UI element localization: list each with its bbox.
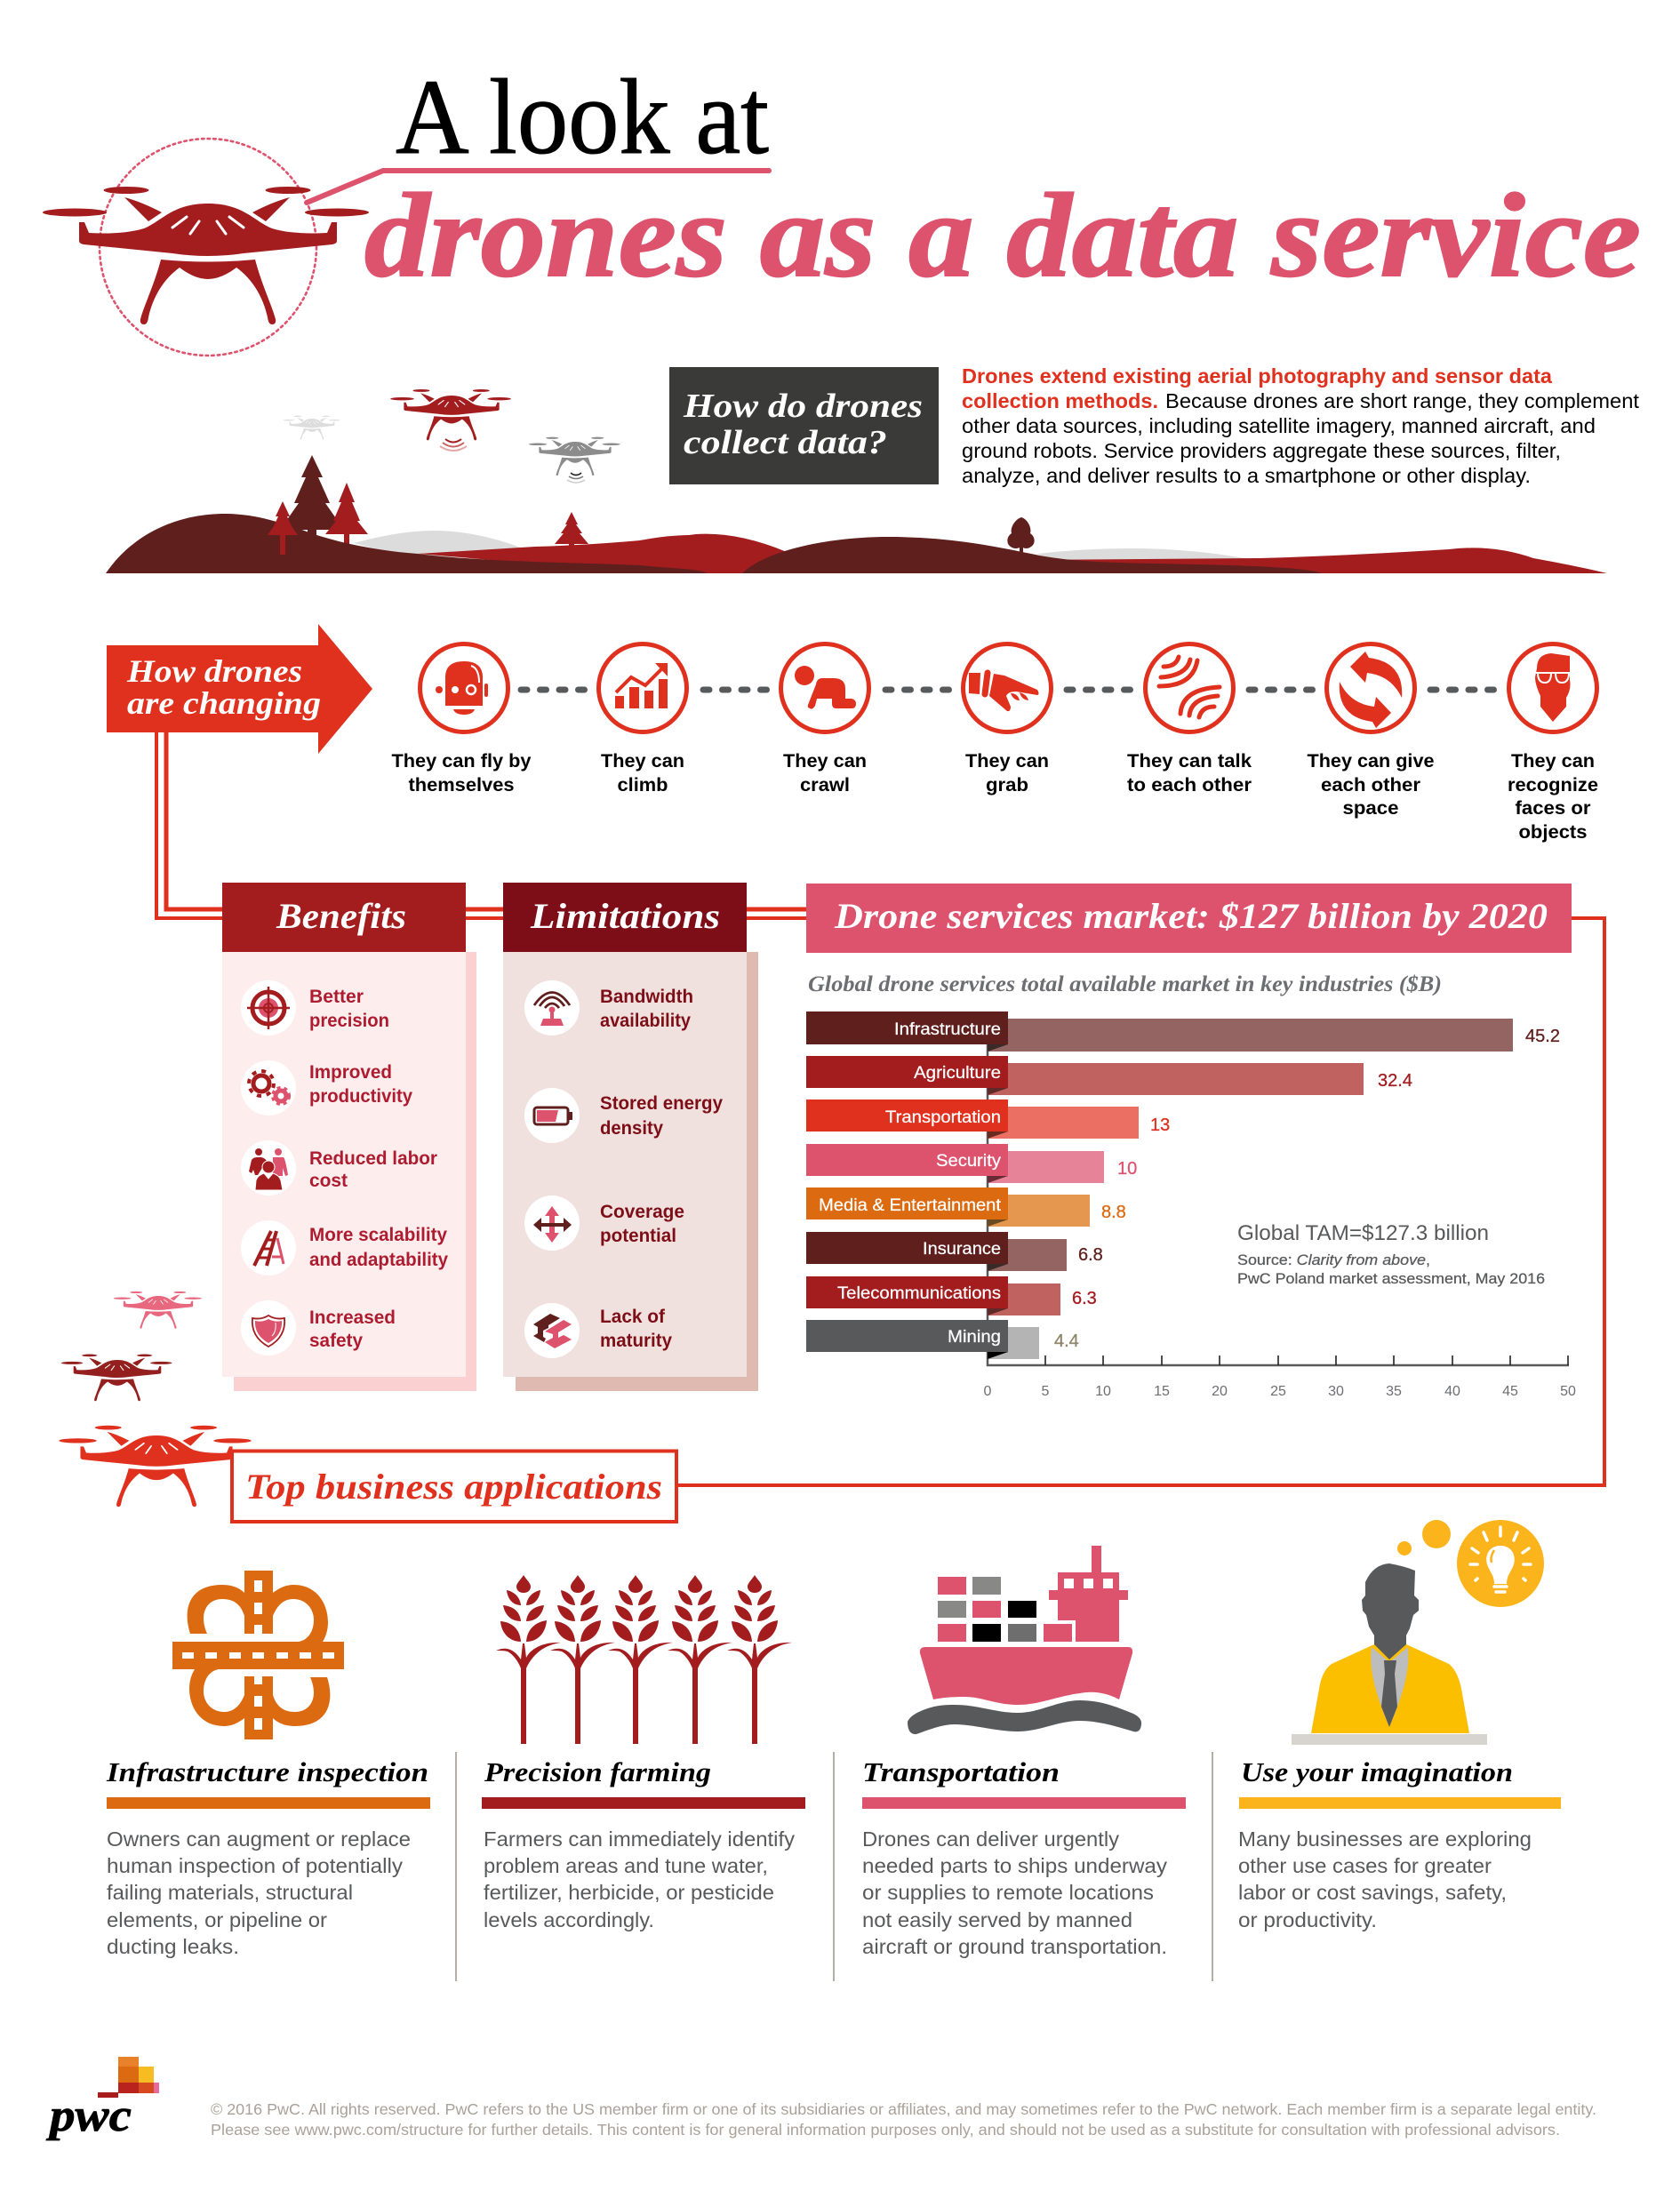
limitations header: Limitations xyxy=(530,896,720,936)
top business applications heading with drone xyxy=(59,1426,676,1522)
capability: recognize faces or objects: recognize xyxy=(1508,774,1598,796)
capability: climb: climb xyxy=(617,774,668,796)
application: infrastructure inspection: failing materials, structural xyxy=(107,1881,353,1904)
icon: wheat xyxy=(496,1575,792,1744)
capability: give each other space: each other xyxy=(1321,774,1421,796)
application: use your imagination: or productivity. xyxy=(1238,1908,1377,1931)
capability: crawl: They can xyxy=(783,750,867,772)
dotted connectors between capability icons xyxy=(521,686,1494,693)
bar: transportation 13: Transportation xyxy=(885,1107,1001,1127)
chart axes: 30 xyxy=(1328,1384,1344,1399)
application: precision farming xyxy=(482,1575,805,1931)
bar: insurance 6.8: 6.8 xyxy=(1078,1245,1103,1265)
title: A look at: A look at xyxy=(396,58,769,177)
benefit: increased safety: Increased xyxy=(309,1307,396,1328)
benefit: scalability: More scalability xyxy=(309,1224,447,1245)
bar: security 10 xyxy=(806,1144,1137,1183)
icon: pink drone xyxy=(114,1291,202,1329)
chart axes: 25 xyxy=(1270,1384,1286,1399)
application: infrastructure inspection: elements, or pipeline or xyxy=(107,1908,327,1931)
chart axes: 45 xyxy=(1502,1384,1518,1399)
benefit: reduced labor cost xyxy=(241,1140,438,1195)
application: precision farming: fertilizer, herbicide, or pesticide xyxy=(484,1881,774,1904)
benefits header: Benefits xyxy=(276,896,406,936)
connector line from market panel to top business applications xyxy=(676,918,1604,1485)
benefit: scalability xyxy=(241,1220,448,1275)
application: transportation: aircraft or ground transportation. xyxy=(862,1935,1167,1958)
bar chart: market by industry xyxy=(806,1012,1576,1399)
application: use your imagination: other use cases for greater xyxy=(1238,1854,1492,1877)
text block: intro paragraph: analyze, and deliver results to a smartphone or other display. xyxy=(962,464,1531,487)
application: use your imagination: Many businesses are exploring xyxy=(1238,1827,1532,1851)
text block: global TAM and source xyxy=(1237,1221,1545,1287)
icon: grey drone with signal xyxy=(529,437,620,483)
benefits header xyxy=(222,883,466,952)
bar: mining 4.4: Mining xyxy=(948,1327,1001,1347)
benefit: better precision: precision xyxy=(309,1010,389,1031)
benefit: reduced labor cost: cost xyxy=(309,1170,348,1191)
capability: give each other space xyxy=(1307,644,1435,819)
capability: climb xyxy=(599,644,686,796)
icon: light grey drone xyxy=(283,416,340,440)
benefit: increased safety: safety xyxy=(309,1330,363,1351)
benefit: scalability: and adaptability xyxy=(309,1249,448,1270)
title leader line xyxy=(307,171,769,203)
benefit: increased safety xyxy=(241,1300,396,1355)
limitation: bandwidth: availability xyxy=(600,1010,691,1031)
limitation: lack of maturity: Lack of xyxy=(600,1306,666,1327)
bar: security 10: Security xyxy=(936,1151,1001,1171)
PwC logo: pwc xyxy=(46,2091,132,2141)
benefit: improved productivity: productivity xyxy=(309,1085,412,1107)
application: use your imagination xyxy=(1238,1520,1561,1931)
landscape with hills and trees xyxy=(106,455,1607,573)
application: transportation: Drones can deliver urgently xyxy=(862,1827,1119,1851)
bar: agriculture 32.4: 32.4 xyxy=(1378,1071,1412,1091)
benefit: better precision xyxy=(241,980,389,1036)
capability: grab xyxy=(964,644,1051,796)
bar: infrastructure 45.2 xyxy=(806,1012,1560,1052)
panel: how do drones collect data: How do drones xyxy=(683,388,923,425)
text block: global TAM and source: Source: Clarity from above , xyxy=(1237,1251,1430,1268)
bar: transportation 13 xyxy=(806,1100,1170,1139)
application: use your imagination: Use your imagination xyxy=(1241,1756,1513,1787)
chart axes xyxy=(984,1044,1576,1399)
capability: talk to each other: to each other xyxy=(1127,774,1252,796)
application: infrastructure inspection: human inspection of potentially xyxy=(107,1854,403,1877)
capability: fly by themselves: themselves xyxy=(409,774,515,796)
arrow: how drones are changing: are changing xyxy=(127,685,321,721)
benefit: improved productivity xyxy=(241,1060,412,1115)
footer legal text: Please see www.pwc.com/structure for further details. This content is for general information purposes only, and should not be used as a substitute for consultation with professional advisors. xyxy=(211,2121,1560,2139)
text block: intro paragraph: Because drones are short range, they complement xyxy=(1165,389,1640,412)
top business applications heading with drone: Top business applications xyxy=(245,1467,662,1507)
panel: how do drones collect data: collect data? xyxy=(684,424,887,461)
chart axes: 35 xyxy=(1386,1384,1402,1399)
panel header: drone services market: Drone services market: $127 billion by 2020 xyxy=(834,896,1548,936)
benefit: improved productivity: Improved xyxy=(309,1061,392,1083)
panel: benefits xyxy=(222,883,476,1391)
chart subtitle: Global drone services total available market in key industries ($B) xyxy=(808,972,1442,996)
icon: cargo ship xyxy=(908,1546,1141,1734)
capability: grab: grab xyxy=(986,774,1028,796)
bar: mining 4.4: 4.4 xyxy=(1054,1331,1079,1351)
limitation: coverage potential: potential xyxy=(600,1225,676,1246)
footer legal text: © 2016 PwC. All rights reserved. PwC refers to the US member firm or one of its subsidiaries or affiliates, and may sometimes refer to the PwC network. Each member firm is a separate legal entity. xyxy=(211,2100,1596,2118)
capability: recognize faces or objects: faces or xyxy=(1515,797,1591,819)
application: infrastructure inspection xyxy=(106,1571,430,1958)
application: use your imagination: labor or cost savings, safety, xyxy=(1238,1881,1507,1904)
limitations header xyxy=(503,883,747,952)
bar: telecommunications 6.3: 6.3 xyxy=(1072,1289,1097,1308)
text block: global TAM and source: Global TAM=$127.3 billion xyxy=(1237,1221,1489,1245)
application: infrastructure inspection: ducting leaks. xyxy=(107,1935,239,1958)
chart axes: 20 xyxy=(1212,1384,1228,1399)
capability: give each other space: They can give xyxy=(1307,750,1435,772)
capability: recognize faces or objects: objects xyxy=(1518,821,1588,843)
text block: intro paragraph xyxy=(962,364,1640,487)
application: transportation: not easily served by manned xyxy=(862,1908,1132,1931)
limitation: stored energy density xyxy=(524,1088,723,1143)
limitation: lack of maturity: maturity xyxy=(600,1330,672,1351)
application: precision farming: Farmers can immediately identify xyxy=(484,1827,795,1851)
application: infrastructure inspection: Owners can augment or replace xyxy=(107,1827,411,1851)
application: transportation: needed parts to ships underway xyxy=(862,1854,1167,1877)
bar: security 10: 10 xyxy=(1117,1159,1137,1179)
bar: agriculture 32.4: Agriculture xyxy=(914,1063,1001,1083)
application: transportation: Transportation xyxy=(862,1756,1060,1787)
arrow: how drones are changing: How drones xyxy=(126,653,302,689)
chart axes: 50 xyxy=(1560,1384,1576,1399)
capability: recognize faces or objects: They can xyxy=(1511,750,1595,772)
text block: intro paragraph: collection methods. xyxy=(962,389,1158,412)
bar: media and entertainment 8.8 xyxy=(806,1187,1126,1227)
benefit: reduced labor cost: Reduced labor xyxy=(309,1147,438,1169)
text block: intro paragraph: other data sources, including satellite imagery, manned aircraft, and xyxy=(962,414,1596,437)
application: precision farming: problem areas and tune water, xyxy=(484,1854,768,1877)
icon: person with lightbulb idea xyxy=(1292,1520,1544,1745)
capability: fly by themselves xyxy=(391,644,532,796)
limitation: coverage potential xyxy=(524,1195,684,1251)
chart axes: 15 xyxy=(1154,1384,1170,1399)
bar: telecommunications 6.3 xyxy=(806,1276,1097,1315)
text block: global TAM and source: PwC Poland market assessment, May 2016 xyxy=(1237,1270,1545,1287)
chart axes: 5 xyxy=(1042,1384,1050,1399)
title: drones as a data service: drones as a data service xyxy=(364,170,1641,302)
bar: infrastructure 45.2: Infrastructure xyxy=(894,1020,1001,1039)
panel: limitations xyxy=(503,883,758,1391)
bar: media and entertainment 8.8: Media & Entertainment xyxy=(819,1195,1002,1215)
text block: intro paragraph: ground robots. Service providers aggregate these sources, filter, xyxy=(962,439,1561,462)
connector lines from arrow through panel headers xyxy=(156,732,806,918)
capability: talk to each other xyxy=(1127,644,1252,796)
capability: talk to each other: They can talk xyxy=(1127,750,1252,772)
text block: intro paragraph: Drones extend existing aerial photography and sensor data xyxy=(962,364,1552,388)
capability: recognize faces or objects xyxy=(1508,644,1598,843)
limitation: stored energy density: Stored energy xyxy=(600,1092,723,1114)
bar: insurance 6.8: Insurance xyxy=(923,1239,1001,1259)
chart axes: 10 xyxy=(1095,1384,1111,1399)
application: infrastructure inspection: Infrastructure inspection xyxy=(106,1756,428,1787)
footer legal text xyxy=(211,2100,1596,2139)
capability: crawl xyxy=(780,644,869,796)
capability: give each other space: space xyxy=(1342,797,1399,819)
icon: road interchange xyxy=(172,1571,344,1739)
chart axes: 40 xyxy=(1444,1384,1460,1399)
application: precision farming: Precision farming xyxy=(484,1756,711,1787)
column dividers xyxy=(456,1752,1212,1981)
bar: infrastructure 45.2: 45.2 xyxy=(1525,1027,1560,1046)
application: transportation: or supplies to remote locations xyxy=(862,1881,1154,1904)
application: precision farming: levels accordingly. xyxy=(484,1908,654,1931)
bar: insurance 6.8 xyxy=(806,1232,1103,1271)
limitation: stored energy density: density xyxy=(600,1117,663,1139)
capability: crawl: crawl xyxy=(800,774,850,796)
limitation: bandwidth: Bandwidth xyxy=(600,986,693,1007)
limitation: coverage potential: Coverage xyxy=(600,1201,684,1222)
benefit: better precision: Better xyxy=(309,986,364,1007)
application: transportation xyxy=(862,1546,1186,1958)
capability: grab: They can xyxy=(965,750,1049,772)
limitation: lack of maturity xyxy=(524,1303,672,1358)
icon: dark red drone xyxy=(61,1355,172,1401)
bar: media and entertainment 8.8: 8.8 xyxy=(1101,1203,1126,1222)
panel header: drone services market xyxy=(806,884,1572,953)
panel: how do drones collect data xyxy=(669,367,939,484)
capability: climb: They can xyxy=(601,750,684,772)
bar: mining 4.4 xyxy=(806,1320,1079,1359)
limitation: bandwidth xyxy=(524,980,693,1036)
arrow: how drones are changing xyxy=(107,624,372,754)
chart axes: 0 xyxy=(984,1384,992,1399)
bar: agriculture 32.4 xyxy=(806,1056,1412,1095)
icon: red drone with signal xyxy=(390,389,511,451)
PwC logo xyxy=(46,2057,159,2141)
bar: transportation 13: 13 xyxy=(1150,1115,1170,1135)
bar: telecommunications 6.3: Telecommunications xyxy=(837,1283,1001,1303)
icon: main drone in dotted circle xyxy=(43,139,369,356)
capability: fly by themselves: They can fly by xyxy=(391,750,532,772)
